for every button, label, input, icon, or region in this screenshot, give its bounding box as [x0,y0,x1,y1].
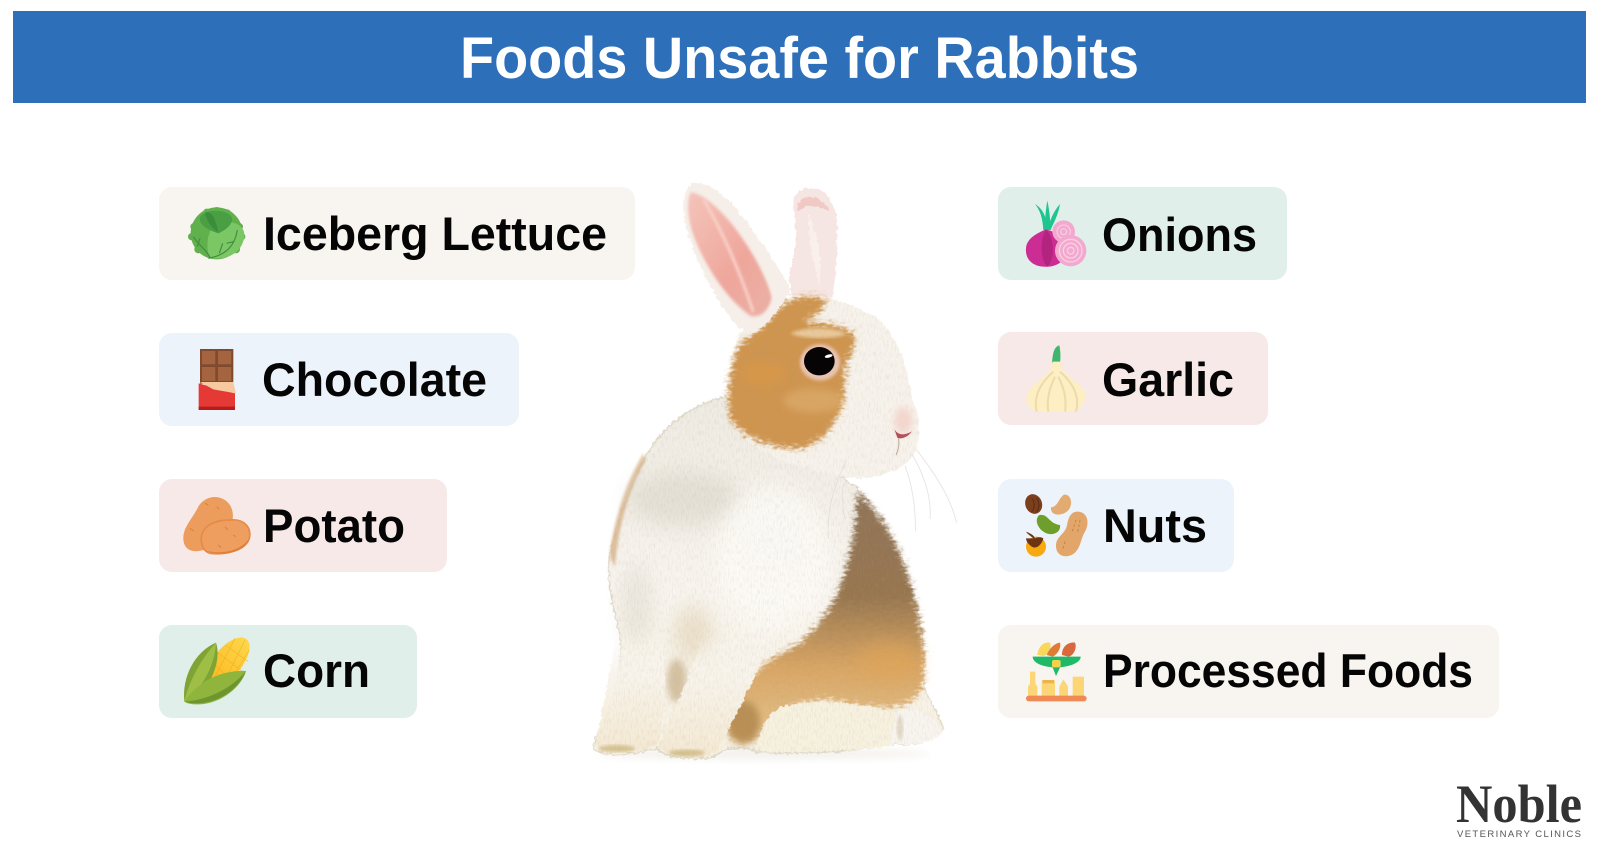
brown back patch [728,491,924,741]
pill: processed foods [998,625,1499,718]
orange flank highlight [857,641,920,681]
pill: potato [159,479,447,572]
nose and mouth [894,407,913,455]
label: Nuts [1103,499,1207,552]
pill: chocolate [159,333,519,426]
fur texture overlay [593,294,947,760]
pill: iceberg lettuce [159,187,635,280]
left ear [684,183,791,334]
icon: onion [1026,201,1086,267]
whiskers [828,450,957,539]
icon: potatoes [183,497,250,554]
ground shadow [597,748,930,759]
rabbit photo illustration [593,183,957,760]
pill: corn [159,625,417,718]
icon: mixed nuts [1022,492,1088,557]
header banner [13,11,1586,103]
paw tips [598,715,903,756]
label: Processed Foods [1103,644,1473,697]
right ear [788,187,837,298]
icon: chocolate bar [199,349,236,410]
title: Foods Unsafe for Rabbits [460,26,1139,91]
orange head markings [728,297,855,449]
pill: onions [998,187,1287,280]
icon: garlic bulb [1026,345,1085,412]
pill: garlic [998,332,1268,425]
front legs and paws [595,633,943,757]
pale streak above eye and lower cheek [740,328,847,412]
label: Iceberg Lettuce [263,207,607,260]
label: Onions [1102,208,1257,261]
rabbit head [728,296,919,478]
label: Garlic [1102,353,1234,406]
label: Chocolate [262,353,487,406]
rabbit body [593,397,943,758]
icon: lettuce [188,207,245,259]
logo: Noble Veterinary Clinics: Noble [1456,774,1582,834]
left rear edge tint [610,454,646,566]
pill: nuts [998,479,1234,572]
label: Potato [263,499,405,552]
eye [800,344,840,381]
body shading [620,472,830,744]
icon: processed food conveyor [1026,643,1087,701]
logo: Noble Veterinary Clinics: VETERINARY CLINICS [1457,829,1581,840]
icon: corn cob [184,637,250,704]
label: Corn [263,644,370,697]
